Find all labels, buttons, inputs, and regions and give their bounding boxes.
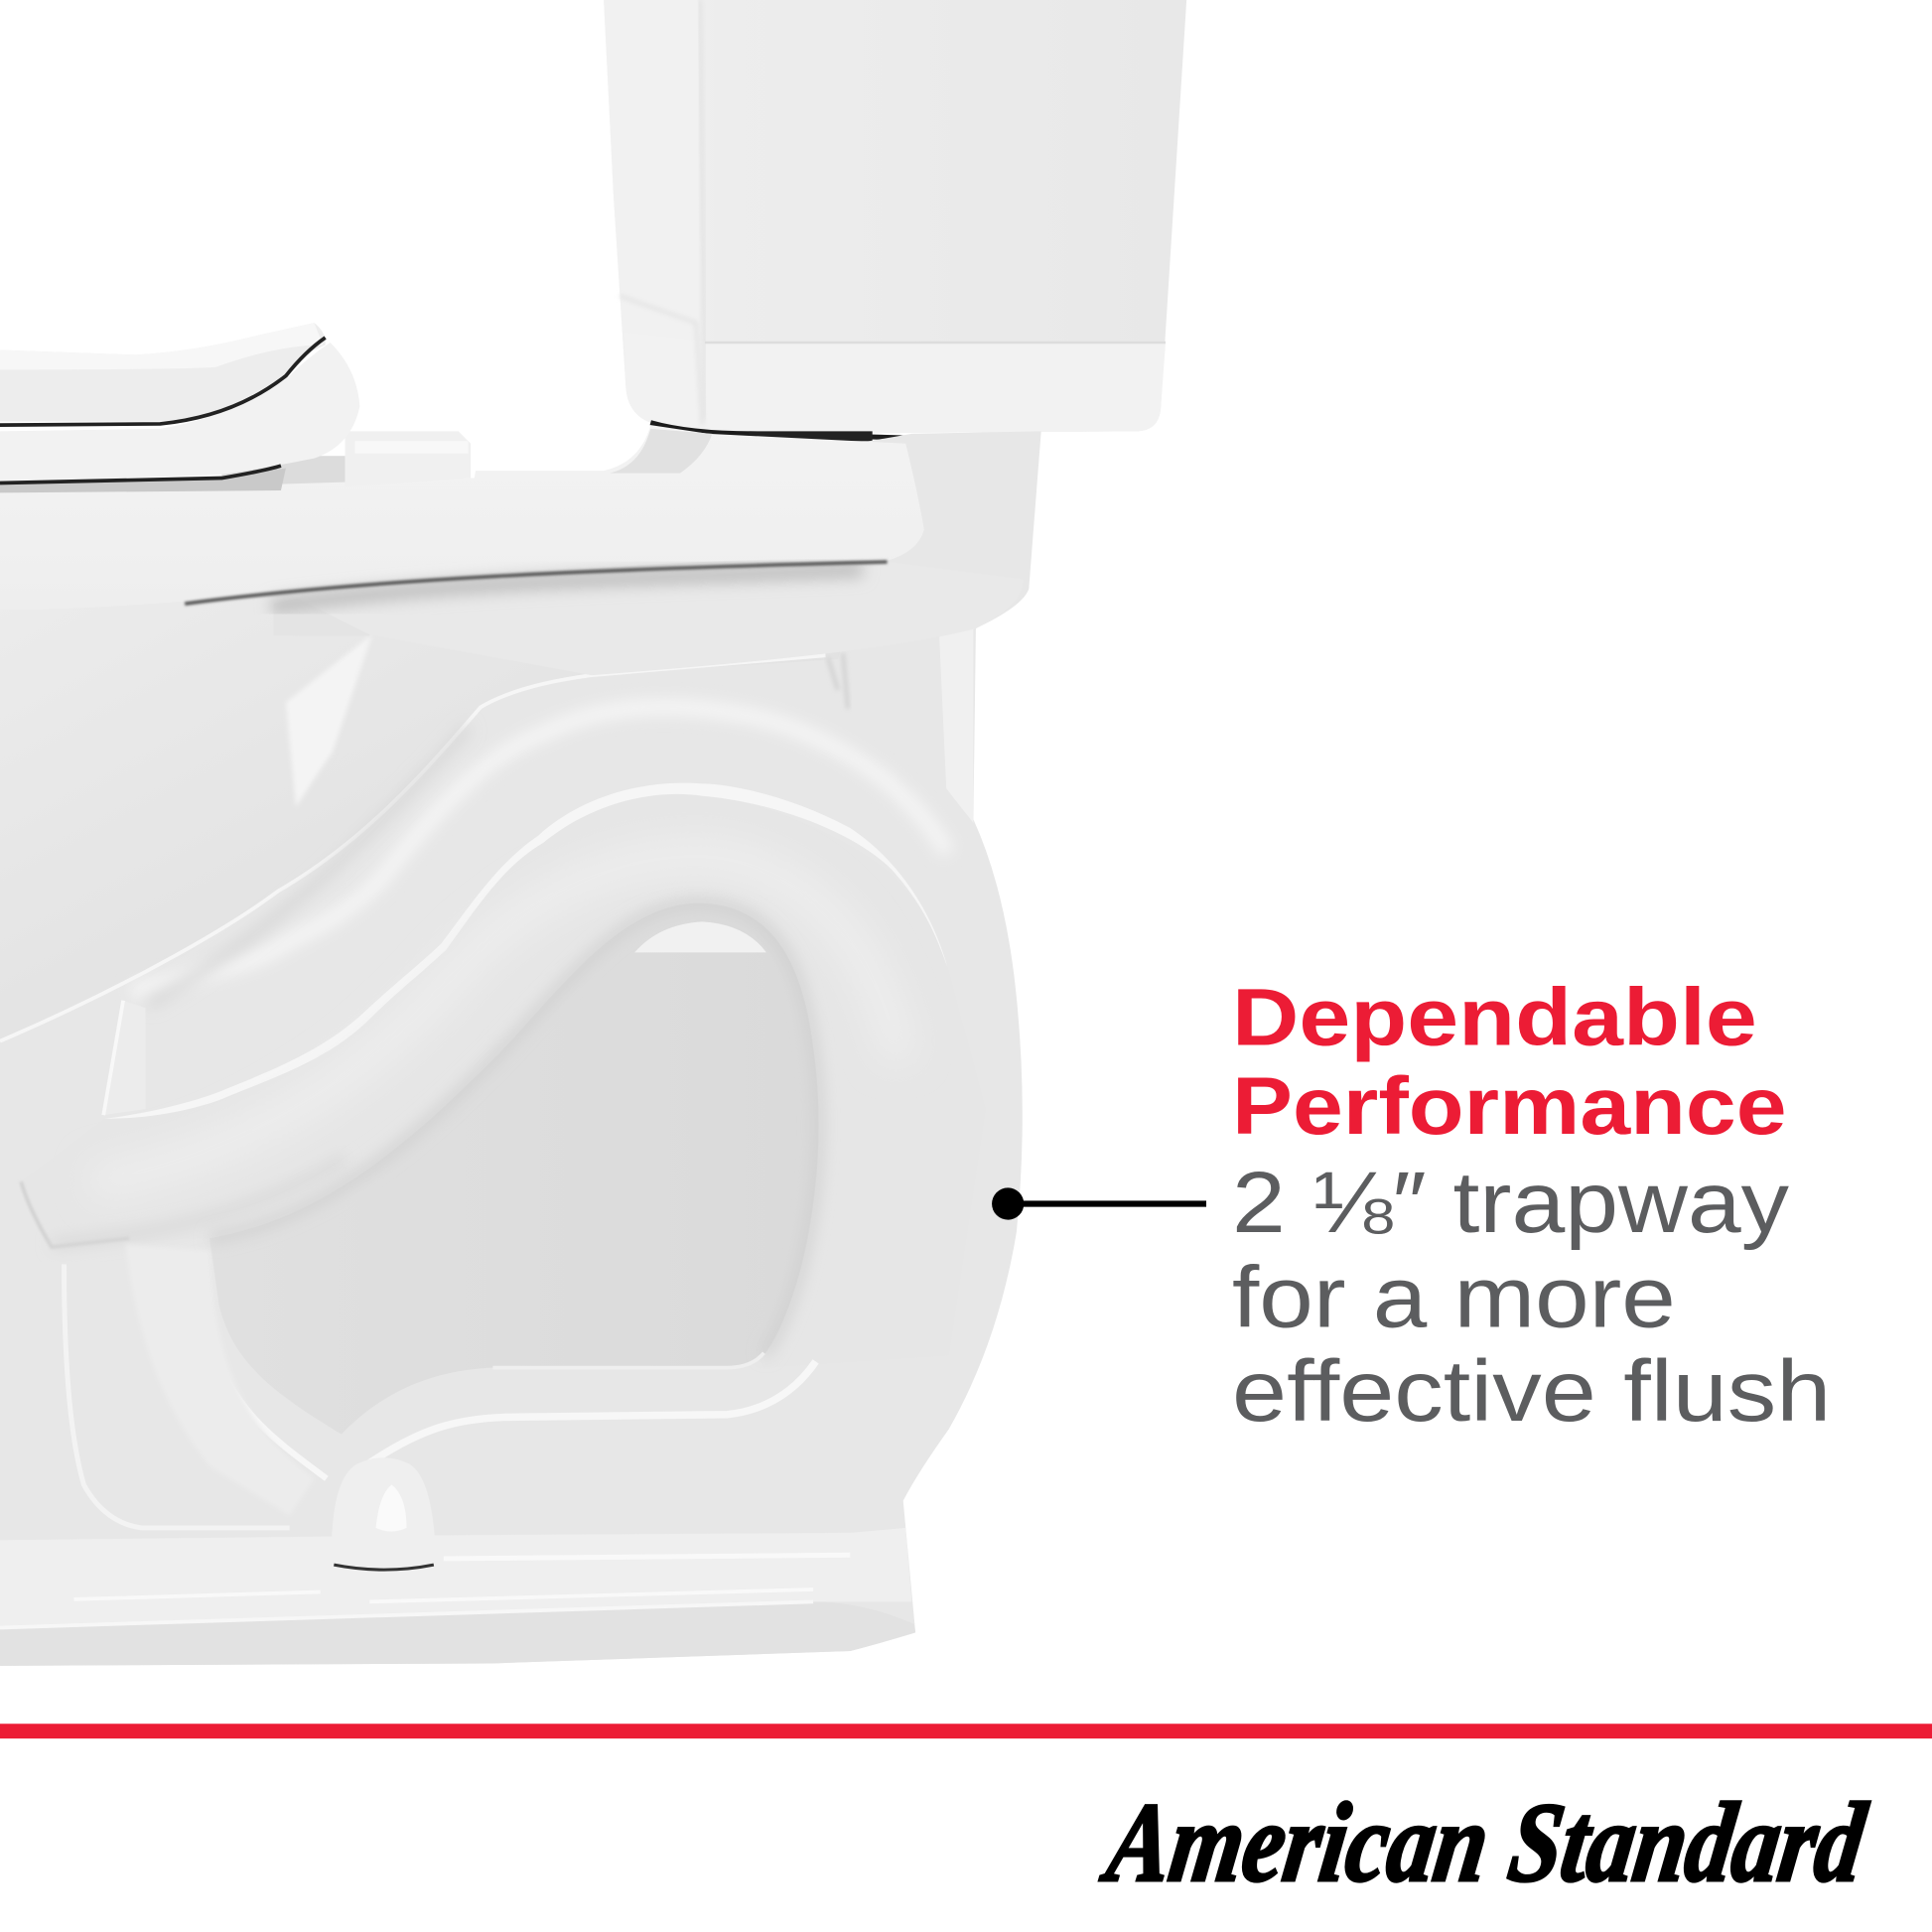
- tube shading: [92, 856, 899, 1182]
- gap filler behind seat: [221, 456, 357, 505]
- recessed panel: [209, 903, 819, 1435]
- toilet seat: [0, 323, 359, 492]
- lower lobes and highlights: [65, 1244, 816, 1528]
- seat lid: [0, 323, 326, 421]
- pointer dot: [992, 1187, 1024, 1220]
- callout pointer: [992, 1187, 1206, 1220]
- callout heading: Performance: [1232, 1061, 1787, 1152]
- callout text: [1232, 972, 1831, 1440]
- pointer line: [1017, 1200, 1206, 1207]
- bolt cap: [332, 1457, 436, 1570]
- trapway ridge: [103, 653, 947, 1115]
- toilet body silhouette: [0, 431, 1041, 1666]
- red divider bar: [0, 1724, 1932, 1738]
- panel top highlight: [634, 921, 766, 952]
- toilet photo illustration: [0, 0, 1186, 1666]
- neck shadow under rim: [283, 561, 1023, 675]
- callout body line 2: for a more: [1232, 1250, 1676, 1346]
- toilet tank: [604, 0, 1186, 441]
- rim: [0, 425, 924, 610]
- bowl: [0, 579, 863, 1041]
- tube top highlight: [104, 783, 947, 1119]
- bowl highlight: [286, 634, 372, 807]
- toilet base plinth: [0, 1528, 915, 1666]
- right column highlight: [939, 628, 973, 823]
- hinge block: [345, 431, 471, 486]
- callout body line 3: effective flush: [1232, 1343, 1831, 1440]
- callout body line 1: 2 ⅛″ trapway: [1232, 1155, 1790, 1251]
- trapway tube: [21, 783, 986, 1368]
- callout heading: Dependable: [1232, 972, 1757, 1062]
